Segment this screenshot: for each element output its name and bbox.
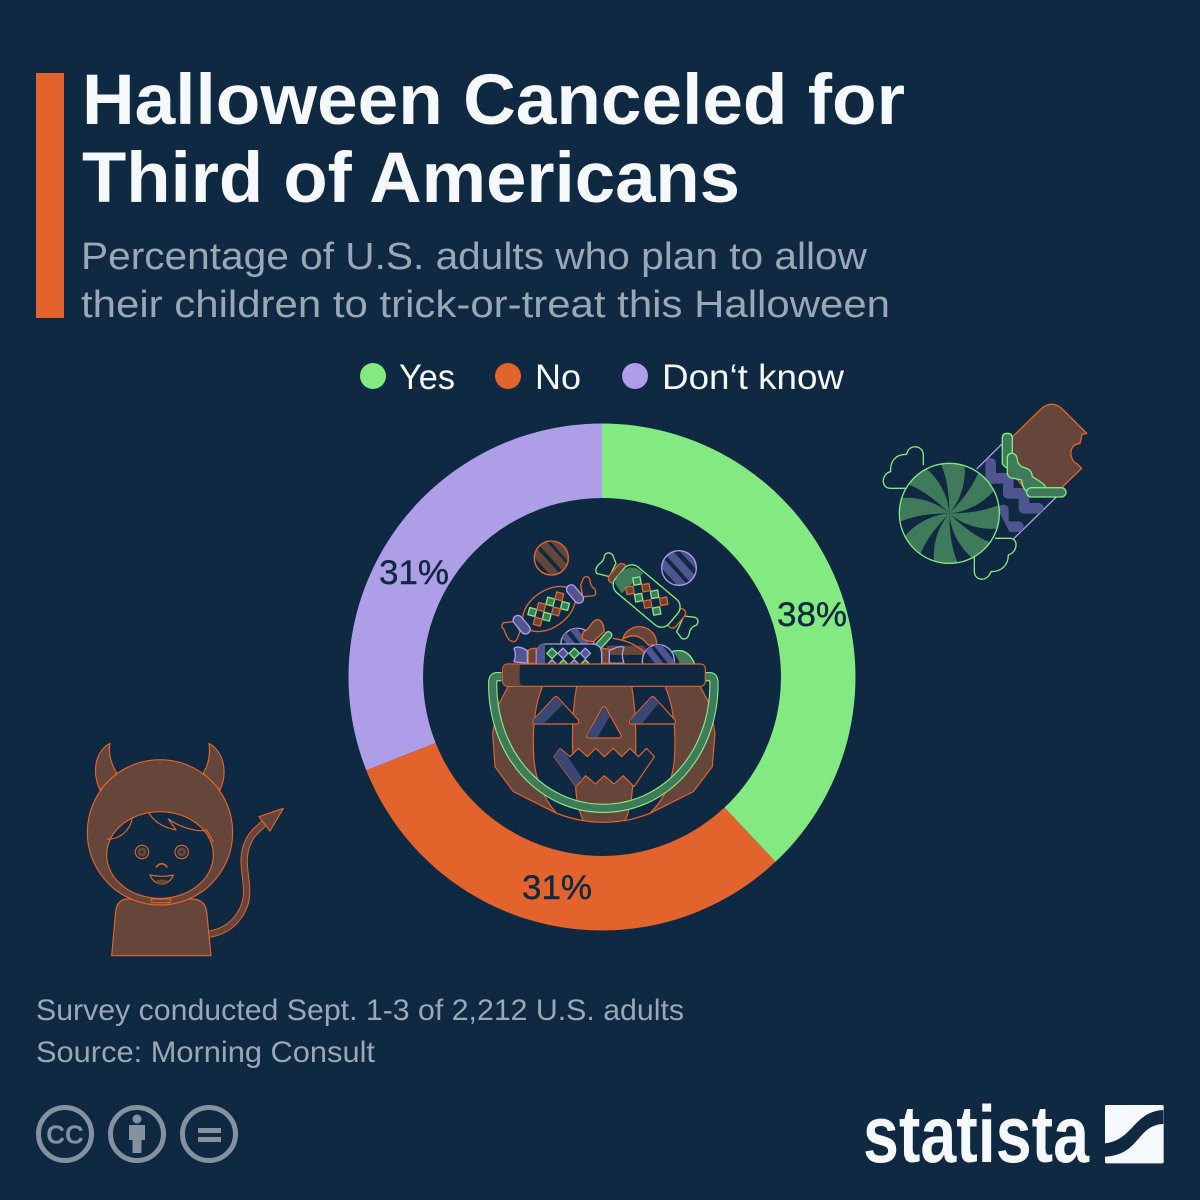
- icon: pumpkin bucket: [493, 664, 715, 822]
- title: Third of Americans: [82, 139, 740, 218]
- horns: [96, 743, 117, 790]
- hair: [107, 813, 213, 842]
- nose and mouth: [150, 864, 173, 884]
- segment: yes 38%: [602, 424, 855, 862]
- brown striped ball: [534, 540, 569, 576]
- cc badge: CC: [46, 1120, 84, 1150]
- face: [107, 812, 213, 898]
- candies piled in the bucket: [513, 619, 696, 664]
- green wrapped candy: [596, 553, 698, 639]
- value labels: 31%: [522, 869, 592, 907]
- donut chart: [349, 424, 855, 930]
- icon: creative commons badges: [38, 1108, 236, 1160]
- legend: Yes: [399, 358, 455, 397]
- subtitle: Percentage of U.S. adults who plan to allow: [81, 236, 868, 278]
- chocolate bar: [977, 404, 1087, 539]
- pumpkin body: [493, 686, 715, 822]
- title: [82, 61, 905, 218]
- legend: Don‘t know: [662, 358, 845, 397]
- icon: devil child: [87, 743, 283, 956]
- pumpkin dark lobes: [533, 686, 675, 821]
- value labels: 38%: [777, 596, 847, 634]
- attribution badge: [110, 1108, 164, 1160]
- icon: candies above the bucket: [502, 535, 707, 677]
- cc badge: [38, 1108, 92, 1160]
- title: Halloween Canceled for: [82, 61, 905, 140]
- pumpkin eyes and nose: [533, 697, 675, 738]
- bucket rim: [503, 664, 705, 686]
- peppermint swirl: [899, 463, 999, 563]
- subtitle: [81, 236, 890, 326]
- accent bar: [36, 73, 64, 318]
- footer notes: Survey conducted Sept. 1-3 of 2,212 U.S. adults: [36, 994, 684, 1027]
- pumpkin mouth: [554, 748, 654, 787]
- icon: candy and chocolate bar: [883, 404, 1087, 579]
- no-derivatives badge: [182, 1108, 236, 1160]
- body: [112, 899, 211, 956]
- legend: [360, 358, 845, 397]
- segment: no 31%: [366, 743, 776, 930]
- value labels: [379, 554, 847, 907]
- segment: don't know 31%: [349, 424, 602, 770]
- purple striped ball: [661, 550, 697, 586]
- eyes: [135, 845, 188, 859]
- tail: [208, 808, 283, 934]
- logo mark: [1105, 1105, 1164, 1163]
- oval candy: [502, 577, 596, 642]
- footer notes: Source: Morning Consult: [36, 1036, 376, 1069]
- legend: No: [535, 358, 581, 397]
- logo: statista: statista: [863, 1090, 1090, 1180]
- bucket handle: [493, 677, 714, 808]
- hood: [87, 760, 233, 905]
- peppermint wrapper: [883, 447, 923, 488]
- value labels: 31%: [379, 554, 449, 592]
- subtitle: their children to trick-or-treat this Halloween: [81, 284, 890, 326]
- footer notes: [36, 994, 684, 1069]
